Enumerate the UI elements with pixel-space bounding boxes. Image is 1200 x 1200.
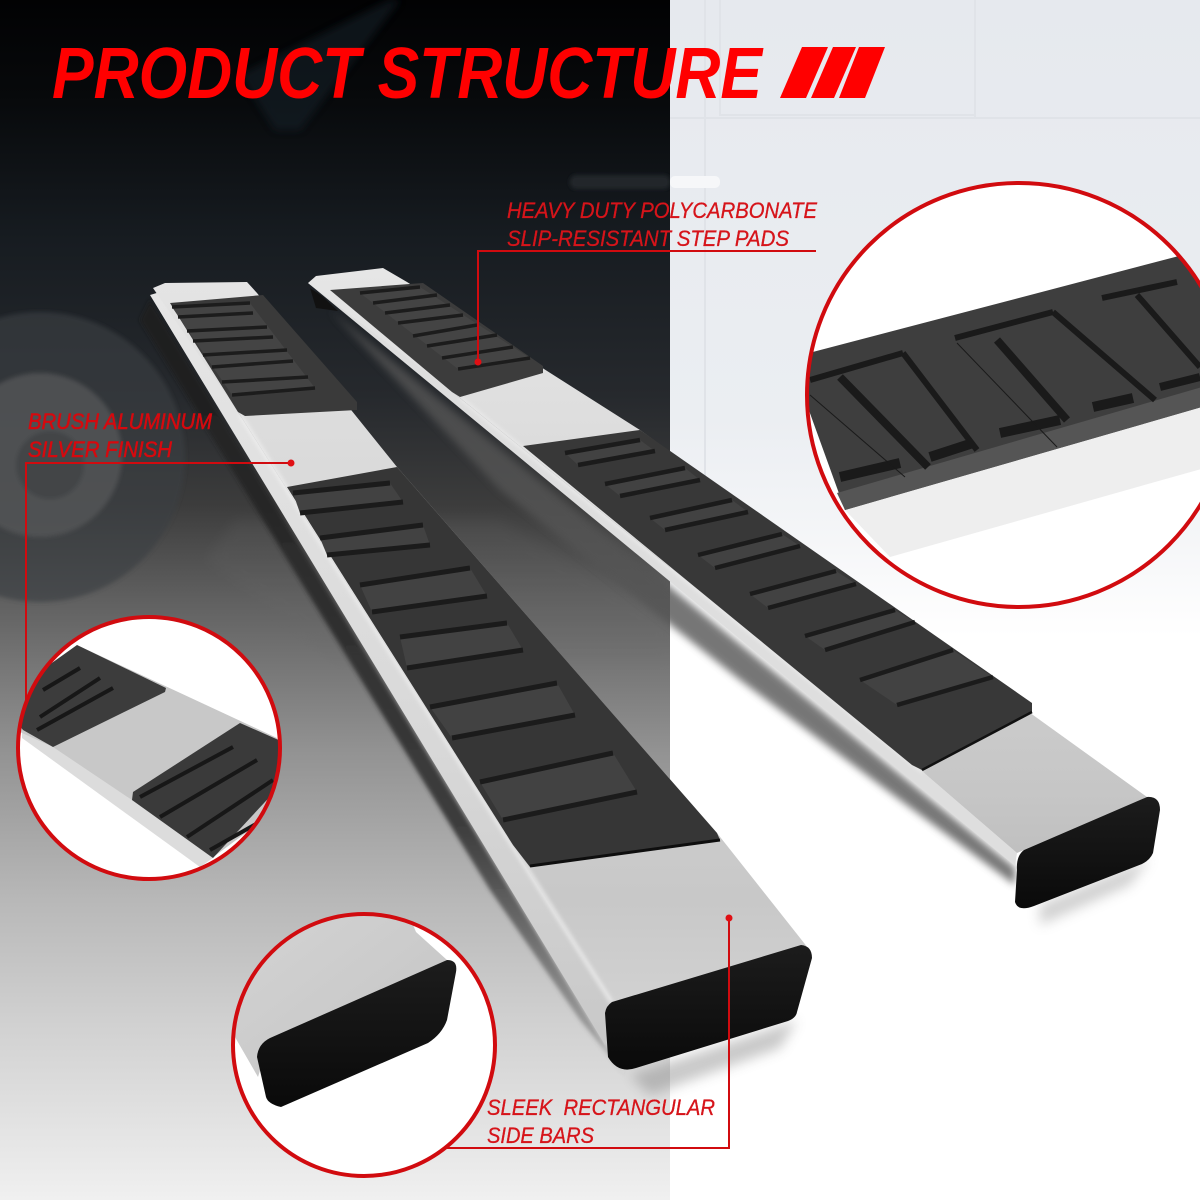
leader line: aluminum finish xyxy=(26,460,294,702)
far rail end cap shadow xyxy=(1040,858,1150,925)
far rail side face xyxy=(308,283,1017,866)
near cap end shadow xyxy=(630,1020,797,1095)
icon: triple slash accent xyxy=(780,47,885,98)
far rail top face xyxy=(308,268,1147,853)
enlarged pad xyxy=(809,256,1200,510)
near rail top face xyxy=(153,282,808,1003)
pad: far rail lower step pad xyxy=(523,430,1032,770)
callout text: side bars: SLEEK RECTANGULAR xyxy=(487,1095,715,1120)
callout text: aluminum finish: BRUSH ALUMINUM xyxy=(28,409,213,434)
far rail shadow xyxy=(330,310,1015,885)
callout circle: step pad detail xyxy=(790,183,1200,607)
callout text: step pads xyxy=(507,198,817,251)
leader line: side bars xyxy=(447,914,732,1148)
background: dark left half with truck xyxy=(0,0,670,1200)
callout text: step pads: SLIP-RESISTANT STEP PADS xyxy=(507,226,789,251)
step bar: near left rail xyxy=(140,282,812,1095)
callout circle: aluminum finish detail xyxy=(0,617,290,879)
callout text: side bars xyxy=(487,1095,715,1148)
callout text: aluminum finish: SILVER FINISH xyxy=(28,437,172,462)
pad: near rail upper step pad xyxy=(170,295,357,416)
near rail side face xyxy=(150,292,612,1045)
callout text: side bars: SIDE BARS xyxy=(487,1123,594,1148)
far rail mounting bracket xyxy=(310,288,338,311)
silver rail strip xyxy=(845,396,1200,557)
leader line: step pads xyxy=(474,251,816,366)
end cap: far rail xyxy=(1015,797,1160,908)
step bar: far right rail xyxy=(308,268,1160,925)
near rail shadow xyxy=(140,300,625,1075)
callout text: step pads: HEAVY DUTY POLYCARBONATE xyxy=(507,198,817,223)
end cap: near rail xyxy=(605,945,812,1070)
callout circle: end cap detail xyxy=(220,905,495,1176)
title: PRODUCT STRUCTURE xyxy=(52,34,764,114)
pad: near rail lower step pad xyxy=(287,467,720,867)
pad: far rail upper step pad xyxy=(330,283,543,397)
background: light right half with truck xyxy=(670,0,1200,1200)
callout text: aluminum finish xyxy=(28,409,213,462)
